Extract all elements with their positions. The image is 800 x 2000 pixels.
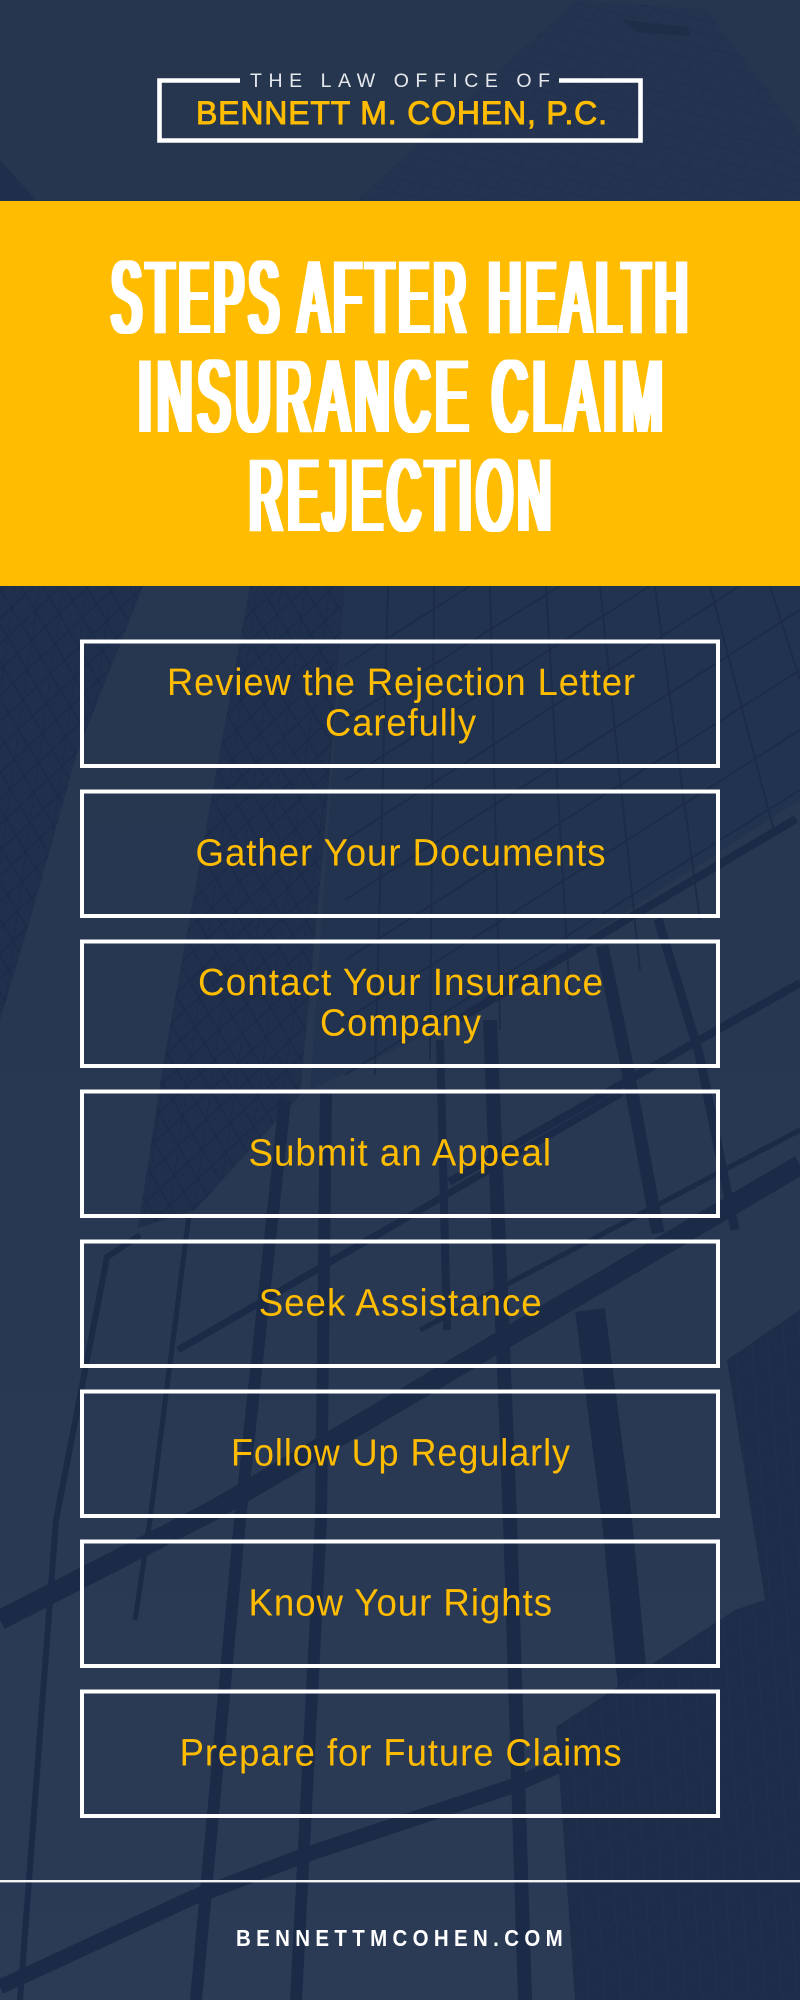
step 4 box bbox=[82, 1092, 718, 1216]
logo small line: THE LAW OFFICE OF bbox=[250, 70, 550, 92]
step 3 box: Company bbox=[320, 1002, 482, 1044]
step 2 box bbox=[82, 792, 718, 916]
step 3 box bbox=[82, 942, 718, 1066]
step 8 box: Prepare for Future Claims bbox=[180, 1732, 623, 1774]
step 5 box bbox=[82, 1242, 718, 1366]
logo bbox=[160, 70, 640, 140]
step 1 box: Review the Rejection Letter bbox=[167, 662, 636, 704]
step 6 box bbox=[82, 1392, 718, 1516]
step 4 box: Submit an Appeal bbox=[248, 1132, 552, 1174]
step 2 box: Gather Your Documents bbox=[196, 832, 606, 874]
step 6 box: Follow Up Regularly bbox=[231, 1432, 571, 1474]
step 1 box bbox=[82, 642, 718, 766]
website: BENNETTMCOHEN.COM bbox=[236, 1925, 568, 1951]
title text bbox=[112, 240, 692, 554]
step 8 box bbox=[82, 1692, 718, 1816]
logo firm name: BENNETT M. COHEN, P.C. bbox=[196, 95, 607, 131]
title banner bbox=[0, 201, 800, 586]
step 1 box: Carefully bbox=[325, 702, 477, 744]
step 7 box bbox=[82, 1542, 718, 1666]
logo frame bbox=[160, 80, 640, 140]
step 7 box: Know Your Rights bbox=[248, 1582, 553, 1624]
step 3 box: Contact Your Insurance bbox=[198, 962, 604, 1004]
step 5 box: Seek Assistance bbox=[259, 1282, 543, 1324]
